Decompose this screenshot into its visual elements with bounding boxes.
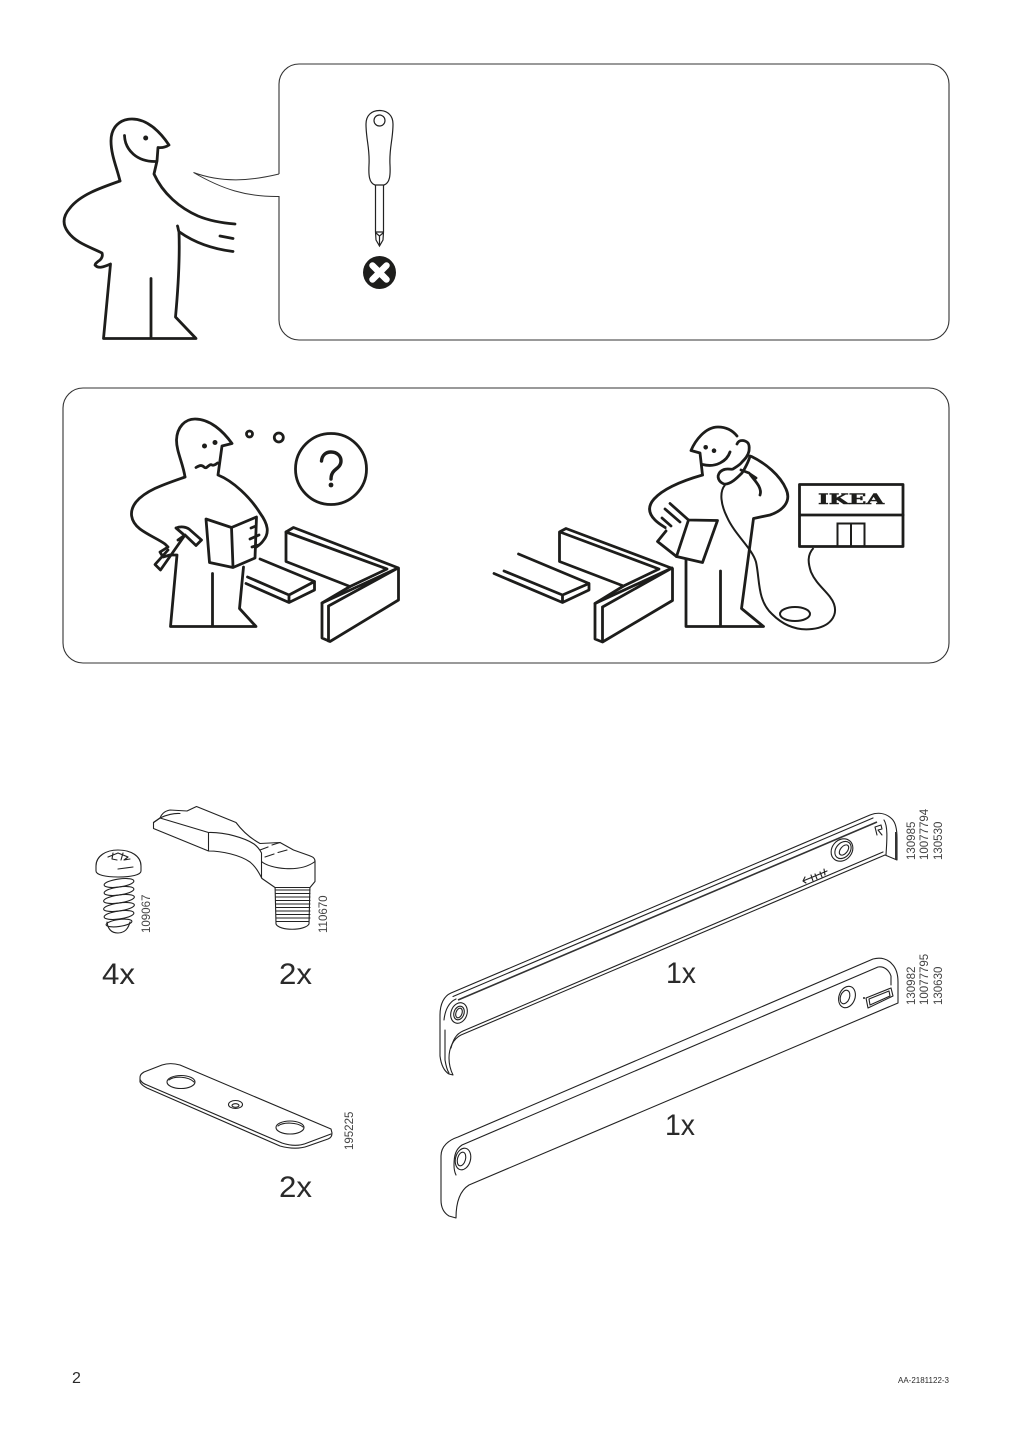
icon: IKEA store bbox=[800, 484, 903, 546]
label: screw quantity and number bbox=[102, 895, 153, 991]
part: lever bolt 110670 bbox=[154, 806, 315, 929]
label: plate quantity and number bbox=[279, 1112, 356, 1204]
figure: happy man calling on phone bbox=[650, 427, 835, 629]
label: top bracket quantity and numbers: 130985 bbox=[906, 822, 918, 860]
label: bottom bracket quantity and numbers bbox=[665, 954, 945, 1142]
label: lever bolt quantity and number: 110670 bbox=[318, 895, 330, 933]
label: lever bolt quantity and number bbox=[279, 895, 330, 991]
icon: not allowed cross bbox=[363, 256, 396, 289]
icon: telephone handset bbox=[718, 440, 761, 495]
label: top bracket quantity and numbers: 10077794 bbox=[919, 808, 931, 860]
icon: IKEA store: IKEA bbox=[818, 492, 886, 508]
part: connecting plate 195225 bbox=[140, 1064, 332, 1148]
label: bottom bracket quantity and numbers: 130630 bbox=[933, 967, 945, 1005]
label: top bracket quantity and numbers: 1x bbox=[666, 957, 696, 990]
icon: screwdriver bbox=[366, 110, 393, 246]
icon: hammer bbox=[155, 527, 202, 570]
thought bubbles and question mark bbox=[246, 431, 366, 504]
furniture frame, incomplete, left bbox=[246, 528, 398, 642]
icon: open manual bbox=[658, 504, 718, 562]
page number: 2 bbox=[72, 1370, 81, 1387]
label: bottom bracket quantity and numbers: 10077795 bbox=[919, 954, 931, 1005]
icon: phone cord bbox=[721, 485, 835, 629]
furniture frame, incomplete, right bbox=[494, 528, 672, 642]
part: top long bracket bbox=[440, 813, 897, 1075]
part: bottom long bracket bbox=[441, 958, 898, 1218]
label: bottom bracket quantity and numbers: 1x bbox=[665, 1109, 695, 1142]
document code: AA-2181122-3 bbox=[898, 1376, 950, 1385]
label: plate quantity and number: 2x bbox=[279, 1171, 312, 1204]
figure: smiling man pointing bbox=[64, 119, 235, 338]
speech bubble panel: wrong tool bbox=[194, 64, 949, 340]
label: top bracket quantity and numbers bbox=[666, 808, 945, 990]
label: screw quantity and number: 109067 bbox=[141, 895, 153, 933]
icon: open manual bbox=[206, 517, 256, 568]
label: top bracket quantity and numbers: 130530 bbox=[933, 822, 945, 860]
panel: ask for help bbox=[63, 388, 949, 663]
label: lever bolt quantity and number: 2x bbox=[279, 958, 312, 991]
figure: confused man with hammer and manual bbox=[131, 419, 267, 626]
label: plate quantity and number: 195225 bbox=[344, 1112, 356, 1150]
part: screw 109067 bbox=[96, 850, 141, 933]
label: screw quantity and number: 4x bbox=[102, 958, 135, 991]
label: bottom bracket quantity and numbers: 130982 bbox=[906, 967, 918, 1005]
